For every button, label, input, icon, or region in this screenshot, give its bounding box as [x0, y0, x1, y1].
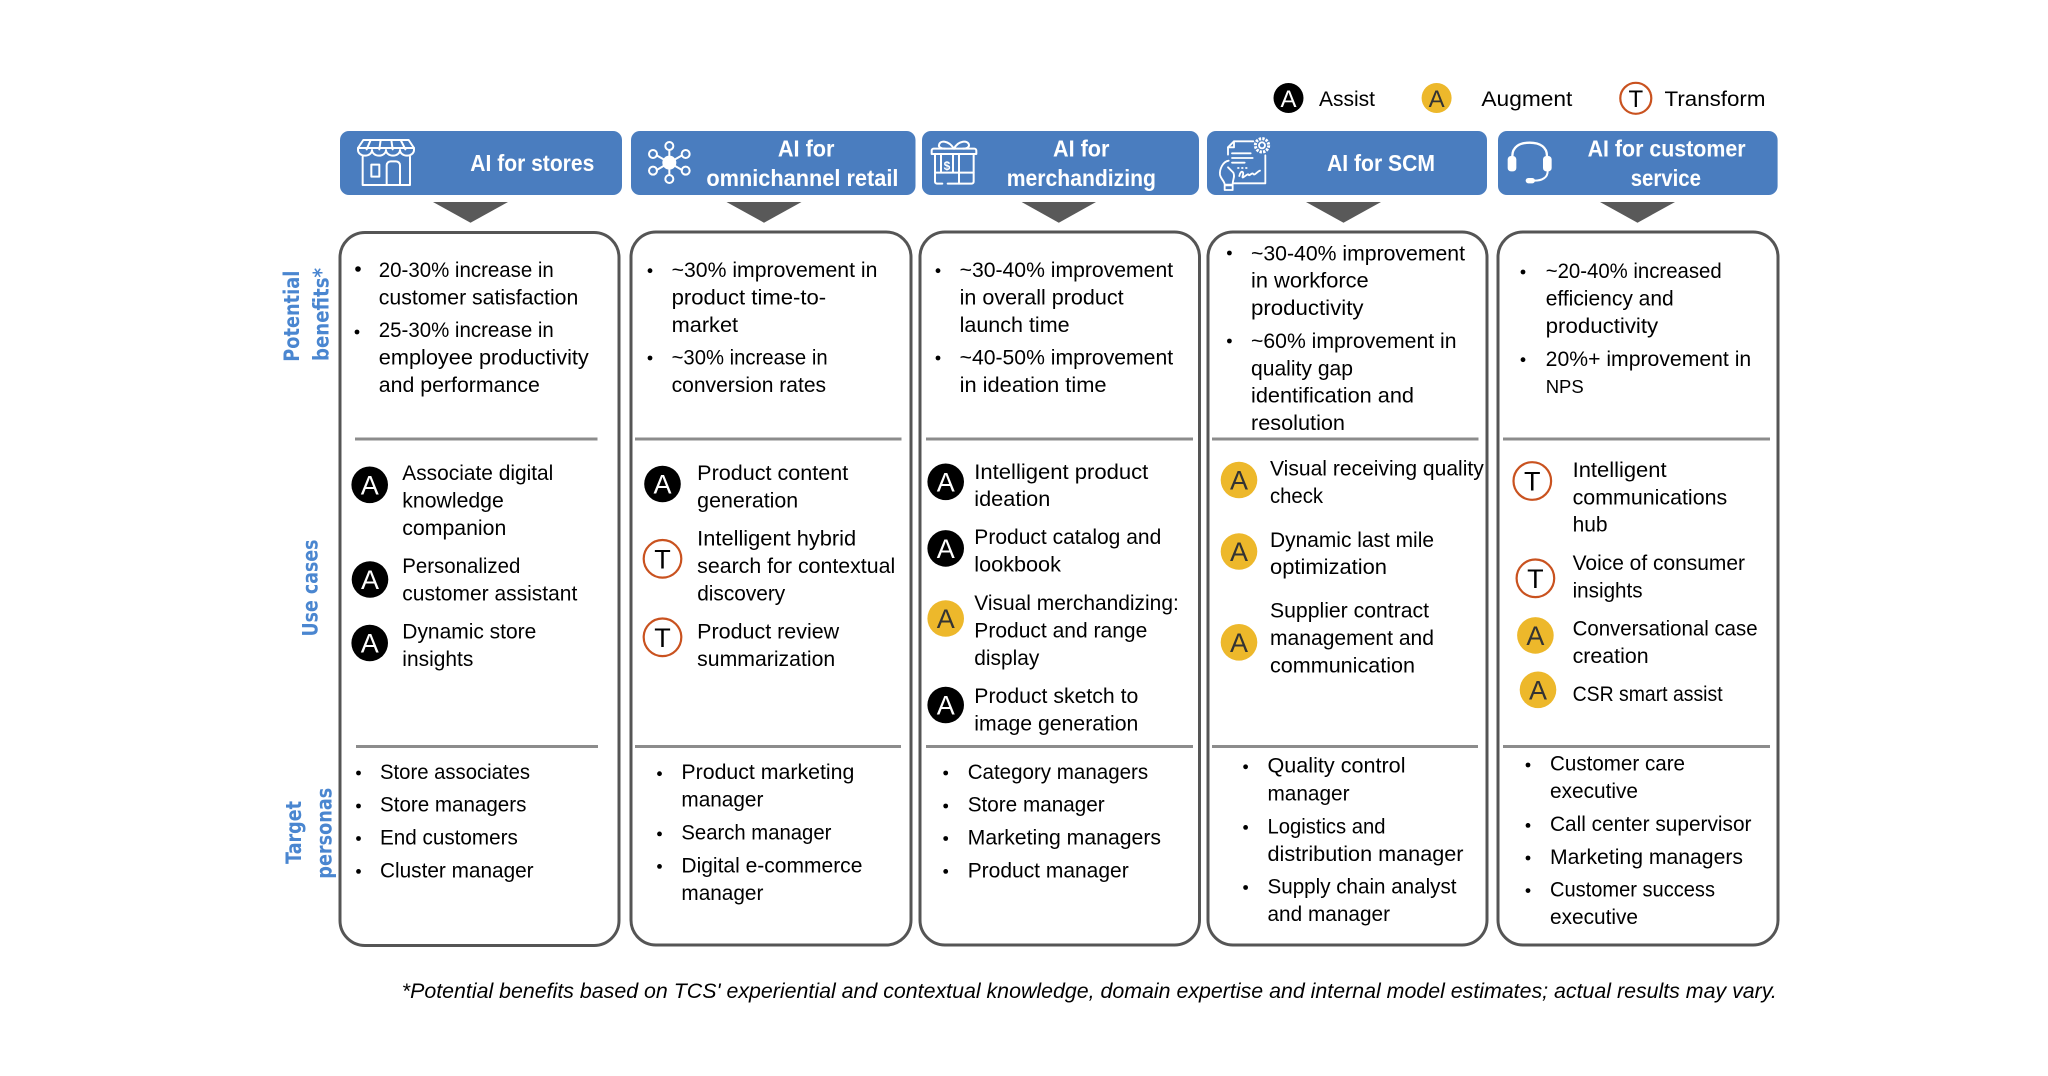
- header: AI for omnichannel retail: [631, 131, 916, 195]
- target personas: SCM: distribution manager: [1268, 843, 1464, 866]
- target personas: merchandizing: Store manager: [968, 794, 1105, 817]
- target personas: stores: [356, 761, 534, 883]
- potential benefits: customer service: [1521, 260, 1751, 397]
- use cases: SCM: [1221, 458, 1484, 677]
- use cases: stores: Associate digital: [402, 462, 553, 485]
- target personas: omnichannel: Product marketing: [681, 761, 854, 784]
- use cases: stores: [351, 462, 577, 671]
- use cases: SCM: A: [1230, 466, 1248, 496]
- potential benefits: omnichannel: product time-to-: [672, 286, 826, 310]
- target personas: customer service: Customer care: [1550, 753, 1685, 776]
- target personas: SCM: Quality control: [1268, 755, 1406, 778]
- use cases: customer service: insights: [1573, 579, 1643, 602]
- panel: AI for SCM: [1208, 232, 1487, 945]
- use cases: merchandizing: Product and range: [974, 619, 1147, 642]
- target personas: SCM: Logistics and: [1268, 816, 1386, 839]
- use cases: customer service: CSR smart assist: [1573, 683, 1723, 706]
- potential benefits: SCM: productivity: [1251, 297, 1364, 320]
- icon: store: [358, 140, 414, 185]
- row label: potential benefits: benefits*: [309, 268, 333, 361]
- use cases: omnichannel: A: [653, 470, 672, 500]
- use cases: SCM: A: [1230, 537, 1248, 567]
- use cases: customer service: [1514, 459, 1758, 708]
- use cases: omnichannel: summarization: [697, 648, 835, 671]
- potential benefits: customer service: 20%+ improvement in: [1546, 348, 1751, 371]
- use cases: omnichannel: T: [654, 623, 671, 653]
- use cases: customer service: T: [1524, 466, 1541, 496]
- potential benefits: merchandizing: ~40-50% improvement: [960, 346, 1173, 370]
- use cases: customer service: A: [1529, 676, 1547, 706]
- use cases: stores: knowledge: [402, 489, 504, 512]
- potential benefits: stores: 20-30% increase in: [379, 259, 554, 282]
- use cases: stores: customer assistant: [402, 582, 577, 605]
- use cases: customer service: Voice of consumer: [1573, 552, 1745, 575]
- row label: target personas: Target: [282, 801, 306, 864]
- target personas: merchandizing: Product manager: [968, 860, 1129, 883]
- use cases: omnichannel: Product content: [697, 462, 848, 485]
- panel: AI for customer service: [1498, 232, 1778, 945]
- potential benefits: SCM: identification and: [1251, 385, 1414, 408]
- target personas: omnichannel: [657, 761, 862, 905]
- target personas: customer service: Call center supervisor: [1550, 813, 1752, 836]
- use cases: merchandizing: A: [937, 534, 955, 564]
- target personas: merchandizing: Category managers: [968, 761, 1148, 784]
- use cases: SCM: communication: [1270, 654, 1415, 677]
- use cases: merchandizing: [927, 461, 1179, 735]
- header: AI for customer service: AI for customer: [1588, 136, 1746, 162]
- target personas: customer service: Customer success: [1550, 878, 1715, 901]
- legend: assist: Assist: [1319, 88, 1375, 111]
- target personas: SCM: Supply chain analyst: [1268, 875, 1457, 898]
- legend: augment: [1422, 83, 1573, 113]
- use cases: stores: A: [361, 565, 379, 595]
- use cases: stores: insights: [402, 648, 473, 671]
- target personas: merchandizing: [943, 761, 1161, 883]
- footnote: *Potential benefits based on TCS' experiential and contextual knowledge, domain expertise and internal model estimates; actual results may vary.: [402, 980, 1777, 1003]
- legend: transform: [1620, 83, 1766, 114]
- header: AI for customer service: [1498, 131, 1778, 195]
- row label: target personas: [282, 788, 336, 879]
- target personas: customer service: executive: [1550, 780, 1638, 803]
- target personas: omnichannel: Search manager: [681, 822, 831, 845]
- row label: use cases: Use cases: [299, 540, 323, 636]
- target personas: stores: Cluster manager: [380, 860, 534, 883]
- use cases: stores: companion: [402, 517, 506, 540]
- icon: network: [649, 142, 690, 183]
- use cases: merchandizing: A: [937, 468, 955, 498]
- panel: AI for merchandizing: [920, 232, 1200, 945]
- use cases: customer service: A: [1526, 621, 1544, 651]
- potential benefits: SCM: quality gap: [1251, 358, 1353, 381]
- icon: contract with gear and hand: [1220, 139, 1269, 190]
- target personas: SCM: manager: [1268, 782, 1350, 805]
- arrow: stores: [433, 202, 508, 223]
- arrow: SCM: [1306, 202, 1381, 223]
- use cases: stores: A: [361, 628, 379, 658]
- use cases: omnichannel: Product review: [697, 620, 840, 643]
- potential benefits: customer service: NPS: [1546, 376, 1584, 397]
- potential benefits: stores: 25-30% increase in: [379, 319, 554, 342]
- potential benefits: stores: [355, 259, 589, 397]
- row label: potential benefits: [280, 268, 333, 362]
- use cases: merchandizing: lookbook: [974, 553, 1061, 576]
- row label: potential benefits: Potential: [280, 271, 304, 362]
- potential benefits: merchandizing: in overall product: [960, 286, 1124, 310]
- use cases: omnichannel: T: [654, 544, 671, 574]
- potential benefits: omnichannel: ~30% improvement in: [672, 259, 877, 282]
- use cases: merchandizing: A: [937, 690, 955, 720]
- potential benefits: merchandizing: launch time: [960, 314, 1070, 337]
- potential benefits: merchandizing: in ideation time: [960, 374, 1107, 397]
- use cases: omnichannel: Intelligent hybrid: [697, 527, 856, 550]
- use cases: stores: Personalized: [402, 555, 520, 578]
- panel: AI for stores: [340, 232, 619, 946]
- use cases: merchandizing: Intelligent product: [974, 461, 1148, 484]
- use cases: customer service: creation: [1573, 645, 1649, 668]
- legend: assist: [1274, 83, 1375, 113]
- potential benefits: SCM: ~60% improvement in: [1251, 330, 1456, 353]
- header: AI for SCM: [1207, 131, 1487, 195]
- use cases: SCM: Dynamic last mile: [1270, 529, 1434, 552]
- use cases: merchandizing: Product sketch to: [974, 685, 1138, 708]
- icon: headset: [1508, 143, 1552, 183]
- target personas: omnichannel: manager: [681, 789, 763, 812]
- use cases: SCM: Supplier contract: [1270, 599, 1429, 622]
- potential benefits: SCM: resolution: [1251, 412, 1345, 435]
- header: AI for merchandizing: AI for: [1053, 136, 1109, 162]
- row label: target personas: personas: [312, 788, 336, 879]
- potential benefits: SCM: ~30-40% improvement: [1251, 242, 1465, 265]
- target personas: omnichannel: manager: [681, 882, 763, 905]
- potential benefits: customer service: efficiency and: [1546, 288, 1674, 311]
- target personas: omnichannel: Digital e-commerce: [681, 854, 862, 877]
- use cases: stores: Dynamic store: [402, 620, 536, 643]
- use cases: merchandizing: Visual merchandizing:: [974, 592, 1179, 615]
- potential benefits: omnichannel: ~30% increase in: [672, 346, 828, 370]
- header: AI for merchandizing: [922, 131, 1199, 195]
- target personas: SCM: and manager: [1268, 903, 1390, 926]
- potential benefits: SCM: [1227, 242, 1465, 435]
- target personas: merchandizing: Marketing managers: [968, 827, 1161, 850]
- use cases: merchandizing: ideation: [974, 488, 1050, 511]
- header: AI for SCM: AI for SCM: [1327, 150, 1435, 176]
- target personas: stores: Store managers: [380, 794, 526, 817]
- use cases: SCM: management and: [1270, 627, 1434, 650]
- use cases: SCM: A: [1230, 628, 1248, 658]
- use cases: merchandizing: image generation: [974, 712, 1138, 735]
- use cases: omnichannel: [644, 462, 895, 671]
- header: AI for customer service: service: [1631, 165, 1701, 191]
- potential benefits: customer service: productivity: [1546, 315, 1659, 338]
- potential benefits: stores: and performance: [379, 374, 540, 397]
- legend: [1274, 83, 1766, 114]
- use cases: merchandizing: Product catalog and: [974, 526, 1161, 549]
- legend: assist: A: [1280, 86, 1297, 113]
- use cases: customer service: hub: [1573, 513, 1608, 536]
- header: AI for merchandizing: merchandizing: [1007, 165, 1156, 191]
- arrow: omnichannel: [726, 202, 802, 223]
- target personas: customer service: Marketing managers: [1550, 846, 1743, 869]
- potential benefits: omnichannel: [648, 259, 877, 397]
- potential benefits: merchandizing: ~30-40% improvement: [960, 259, 1173, 282]
- arrow: customer service: [1600, 202, 1675, 223]
- target personas: SCM: [1243, 755, 1464, 926]
- target personas: stores: Store associates: [380, 761, 530, 784]
- use cases: omnichannel: generation: [697, 489, 798, 512]
- use cases: SCM: Visual receiving quality: [1270, 458, 1484, 481]
- potential benefits: stores: customer satisfaction: [379, 286, 578, 310]
- use cases: stores: A: [361, 470, 379, 500]
- legend: transform: Transform: [1664, 88, 1766, 111]
- potential benefits: omnichannel: conversion rates: [672, 374, 826, 397]
- target personas: customer service: [1526, 753, 1752, 929]
- use cases: customer service: Intelligent: [1573, 459, 1667, 482]
- use cases: SCM: check: [1270, 485, 1323, 508]
- target personas: stores: End customers: [380, 827, 518, 850]
- potential benefits: SCM: in workforce: [1251, 270, 1369, 293]
- legend: transform: T: [1628, 86, 1643, 113]
- use cases: merchandizing: A: [937, 604, 955, 634]
- use cases: customer service: communications: [1573, 486, 1727, 509]
- icon: gift with price: [932, 142, 976, 184]
- potential benefits: stores: employee productivity: [379, 346, 589, 370]
- legend: augment: A: [1429, 86, 1445, 113]
- header: AI for stores: [340, 131, 622, 195]
- potential benefits: merchandizing: [936, 259, 1173, 397]
- target personas: customer service: executive: [1550, 906, 1638, 929]
- potential benefits: omnichannel: market: [672, 314, 738, 337]
- use cases: omnichannel: search for contextual: [697, 555, 895, 578]
- icon: gift with price: $: [944, 159, 951, 173]
- legend: augment: Augment: [1481, 88, 1573, 111]
- use cases: customer service: T: [1527, 564, 1544, 594]
- potential benefits: customer service: ~20-40% increased: [1546, 260, 1722, 283]
- use cases: merchandizing: display: [974, 647, 1040, 670]
- use cases: omnichannel: discovery: [697, 582, 786, 605]
- arrow: merchandizing: [1022, 202, 1096, 223]
- use cases: customer service: Conversational case: [1573, 617, 1758, 640]
- header: AI for omnichannel retail: omnichannel retail: [706, 165, 898, 191]
- panel: AI for omnichannel retail: [631, 232, 911, 945]
- header: AI for omnichannel retail: AI for: [778, 136, 835, 162]
- use cases: SCM: optimization: [1270, 556, 1387, 579]
- header: AI for stores: AI for stores: [470, 150, 594, 176]
